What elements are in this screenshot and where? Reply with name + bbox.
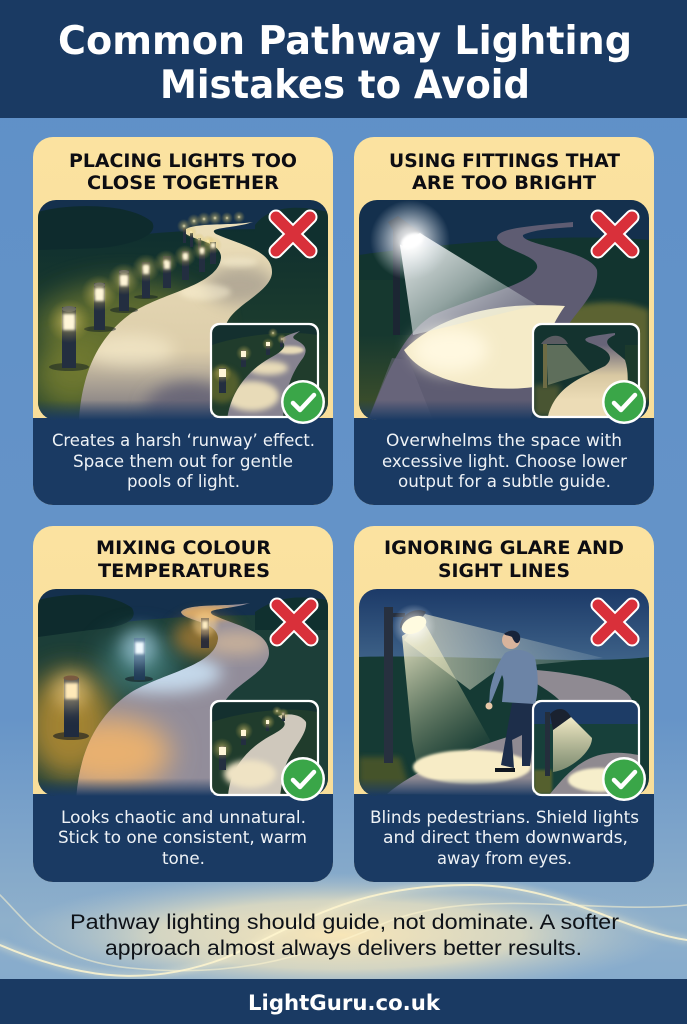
bollards (47, 211, 245, 371)
caption: away from eyes. (437, 849, 572, 868)
footer site name: LightGuru.co.uk (248, 991, 441, 1015)
caption (52, 431, 315, 491)
caption (58, 808, 307, 868)
caption: Looks chaotic and unnatural. (61, 808, 306, 827)
panel: ignoring glare and sight lines (354, 526, 654, 882)
caption: and direct them downwards, (383, 828, 628, 847)
bollards: amber, blue, warm (53, 612, 217, 740)
heading (389, 150, 620, 194)
heading (96, 537, 271, 582)
panel: mixing colour temperatures (25, 526, 333, 882)
icon: green tick (281, 380, 325, 424)
lamp post (384, 604, 436, 763)
scene: glare and pedestrian (359, 589, 649, 796)
heading: TEMPERATURES (98, 560, 270, 582)
heading: USING FITTINGS THAT (389, 150, 620, 172)
street lamp (370, 200, 450, 335)
footer band (0, 979, 687, 1024)
caption: pools of light. (127, 472, 240, 491)
heading: MIXING COLOUR (96, 537, 271, 559)
inset: one warm tone (210, 700, 319, 796)
icon: red cross (598, 605, 632, 639)
inset: lower output (532, 323, 640, 418)
panel: placing lights too close together (32, 137, 333, 505)
heading: CLOSE TOGETHER (87, 172, 279, 194)
icon: red cross (277, 605, 311, 639)
inset: correct spacing (204, 323, 319, 420)
title: Common Pathway Lighting (58, 19, 632, 64)
heading (384, 537, 624, 582)
icon: red cross (598, 217, 632, 251)
icon: red cross (276, 217, 310, 251)
caption (370, 808, 639, 868)
caption: Overwhelms the space with (386, 431, 622, 450)
closing glow with light waves (0, 873, 687, 997)
heading: SIGHT LINES (438, 560, 570, 582)
heading: ARE TOO BRIGHT (412, 172, 596, 194)
caption: Blinds pedestrians. Shield lights (370, 808, 639, 827)
icon: green tick (602, 380, 646, 424)
caption: excessive light. Choose lower (382, 452, 627, 471)
scene: lights in a dense row (32, 200, 328, 438)
pedestrian (486, 631, 538, 772)
heading (69, 150, 297, 194)
icon: green tick (602, 757, 646, 801)
scene: overbright lamp (359, 200, 649, 420)
caption: Stick to one consistent, warm (58, 828, 307, 847)
scene: mixed colour bollards (25, 589, 328, 801)
header band (0, 0, 687, 118)
heading: IGNORING GLARE AND (384, 537, 624, 559)
caption (382, 431, 627, 491)
caption: Creates a harsh ‘runway’ effect. (52, 431, 315, 450)
icon: green tick (281, 757, 325, 801)
closing message: approach almost always delivers better results. (105, 937, 582, 960)
caption: tone. (162, 849, 205, 868)
closing message (70, 911, 619, 960)
inset: shielded fitting (532, 700, 640, 796)
panel: using fittings that are too bright (354, 137, 654, 505)
header band: Mistakes to Avoid (160, 63, 530, 108)
heading: PLACING LIGHTS TOO (69, 150, 297, 172)
caption: output for a subtle guide. (398, 472, 611, 491)
caption: Space them out for gentle (73, 452, 293, 471)
closing message: Pathway lighting should guide, not dominate. A softer (70, 911, 619, 934)
